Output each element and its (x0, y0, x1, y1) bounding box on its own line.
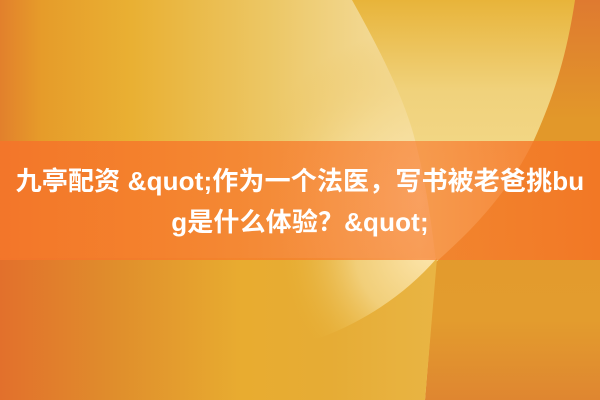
pale curved highlight (240, 258, 437, 345)
title line one: 九亭配资 &quot;作为一个法医，写书被老爸挑bu (16, 166, 584, 196)
title line two: g是什么体验？&quot; (171, 207, 429, 237)
orange title band (0, 141, 600, 260)
lower field (0, 258, 437, 400)
title (16, 166, 584, 237)
right orange curve (425, 0, 600, 400)
middle wedge (352, 0, 600, 262)
